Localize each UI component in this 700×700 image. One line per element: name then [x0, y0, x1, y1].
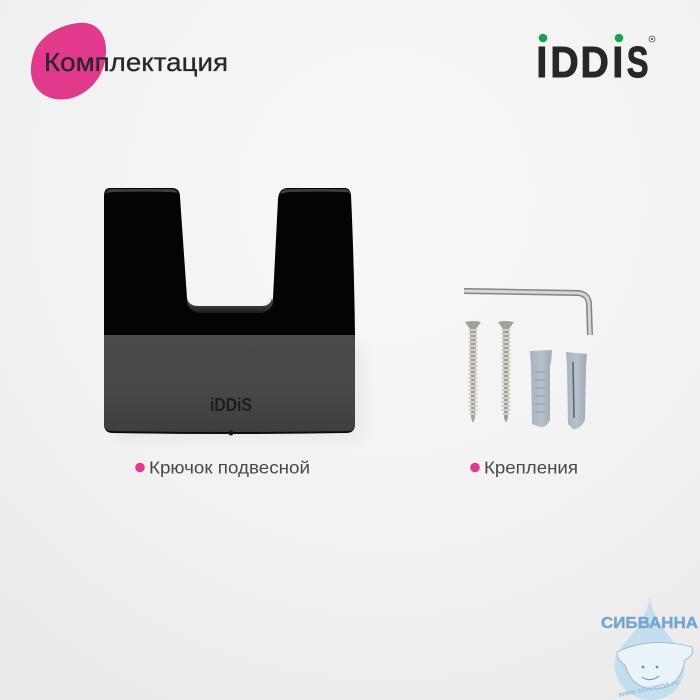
hook engraved logo: iDDiS	[210, 395, 252, 415]
hook upper glossy part	[104, 188, 355, 335]
pink blob	[31, 23, 106, 100]
bathtub face	[642, 666, 659, 680]
hook notch bevel	[187, 298, 273, 313]
url: www.sibvanna.ru	[617, 677, 680, 699]
heading: Комплектация	[31, 23, 228, 100]
caption: fasteners: Крепления	[484, 458, 578, 478]
logo: IDDIS	[536, 34, 655, 87]
wall plug 1	[530, 350, 552, 427]
title text: Комплектация	[44, 47, 228, 77]
product: black hook	[104, 188, 365, 440]
hook top edge highlight	[106, 189, 350, 194]
hook bottom edge	[104, 424, 355, 434]
wall plug 2	[566, 352, 587, 429]
hook lower matte part	[104, 335, 355, 433]
brand name: СИБВАННА	[601, 615, 698, 632]
logo: IDDIS: IDDI	[536, 38, 623, 86]
caption: hook: Крючок подвесной	[149, 458, 310, 478]
logo: IDDIS: S	[627, 39, 648, 87]
screw 2	[498, 321, 514, 423]
hex key	[464, 291, 590, 335]
watermark: Сибванна	[601, 597, 698, 700]
product: mounting hardware	[464, 291, 590, 429]
water drop	[615, 597, 685, 700]
screw 1	[465, 321, 481, 423]
bathtub	[617, 643, 693, 689]
